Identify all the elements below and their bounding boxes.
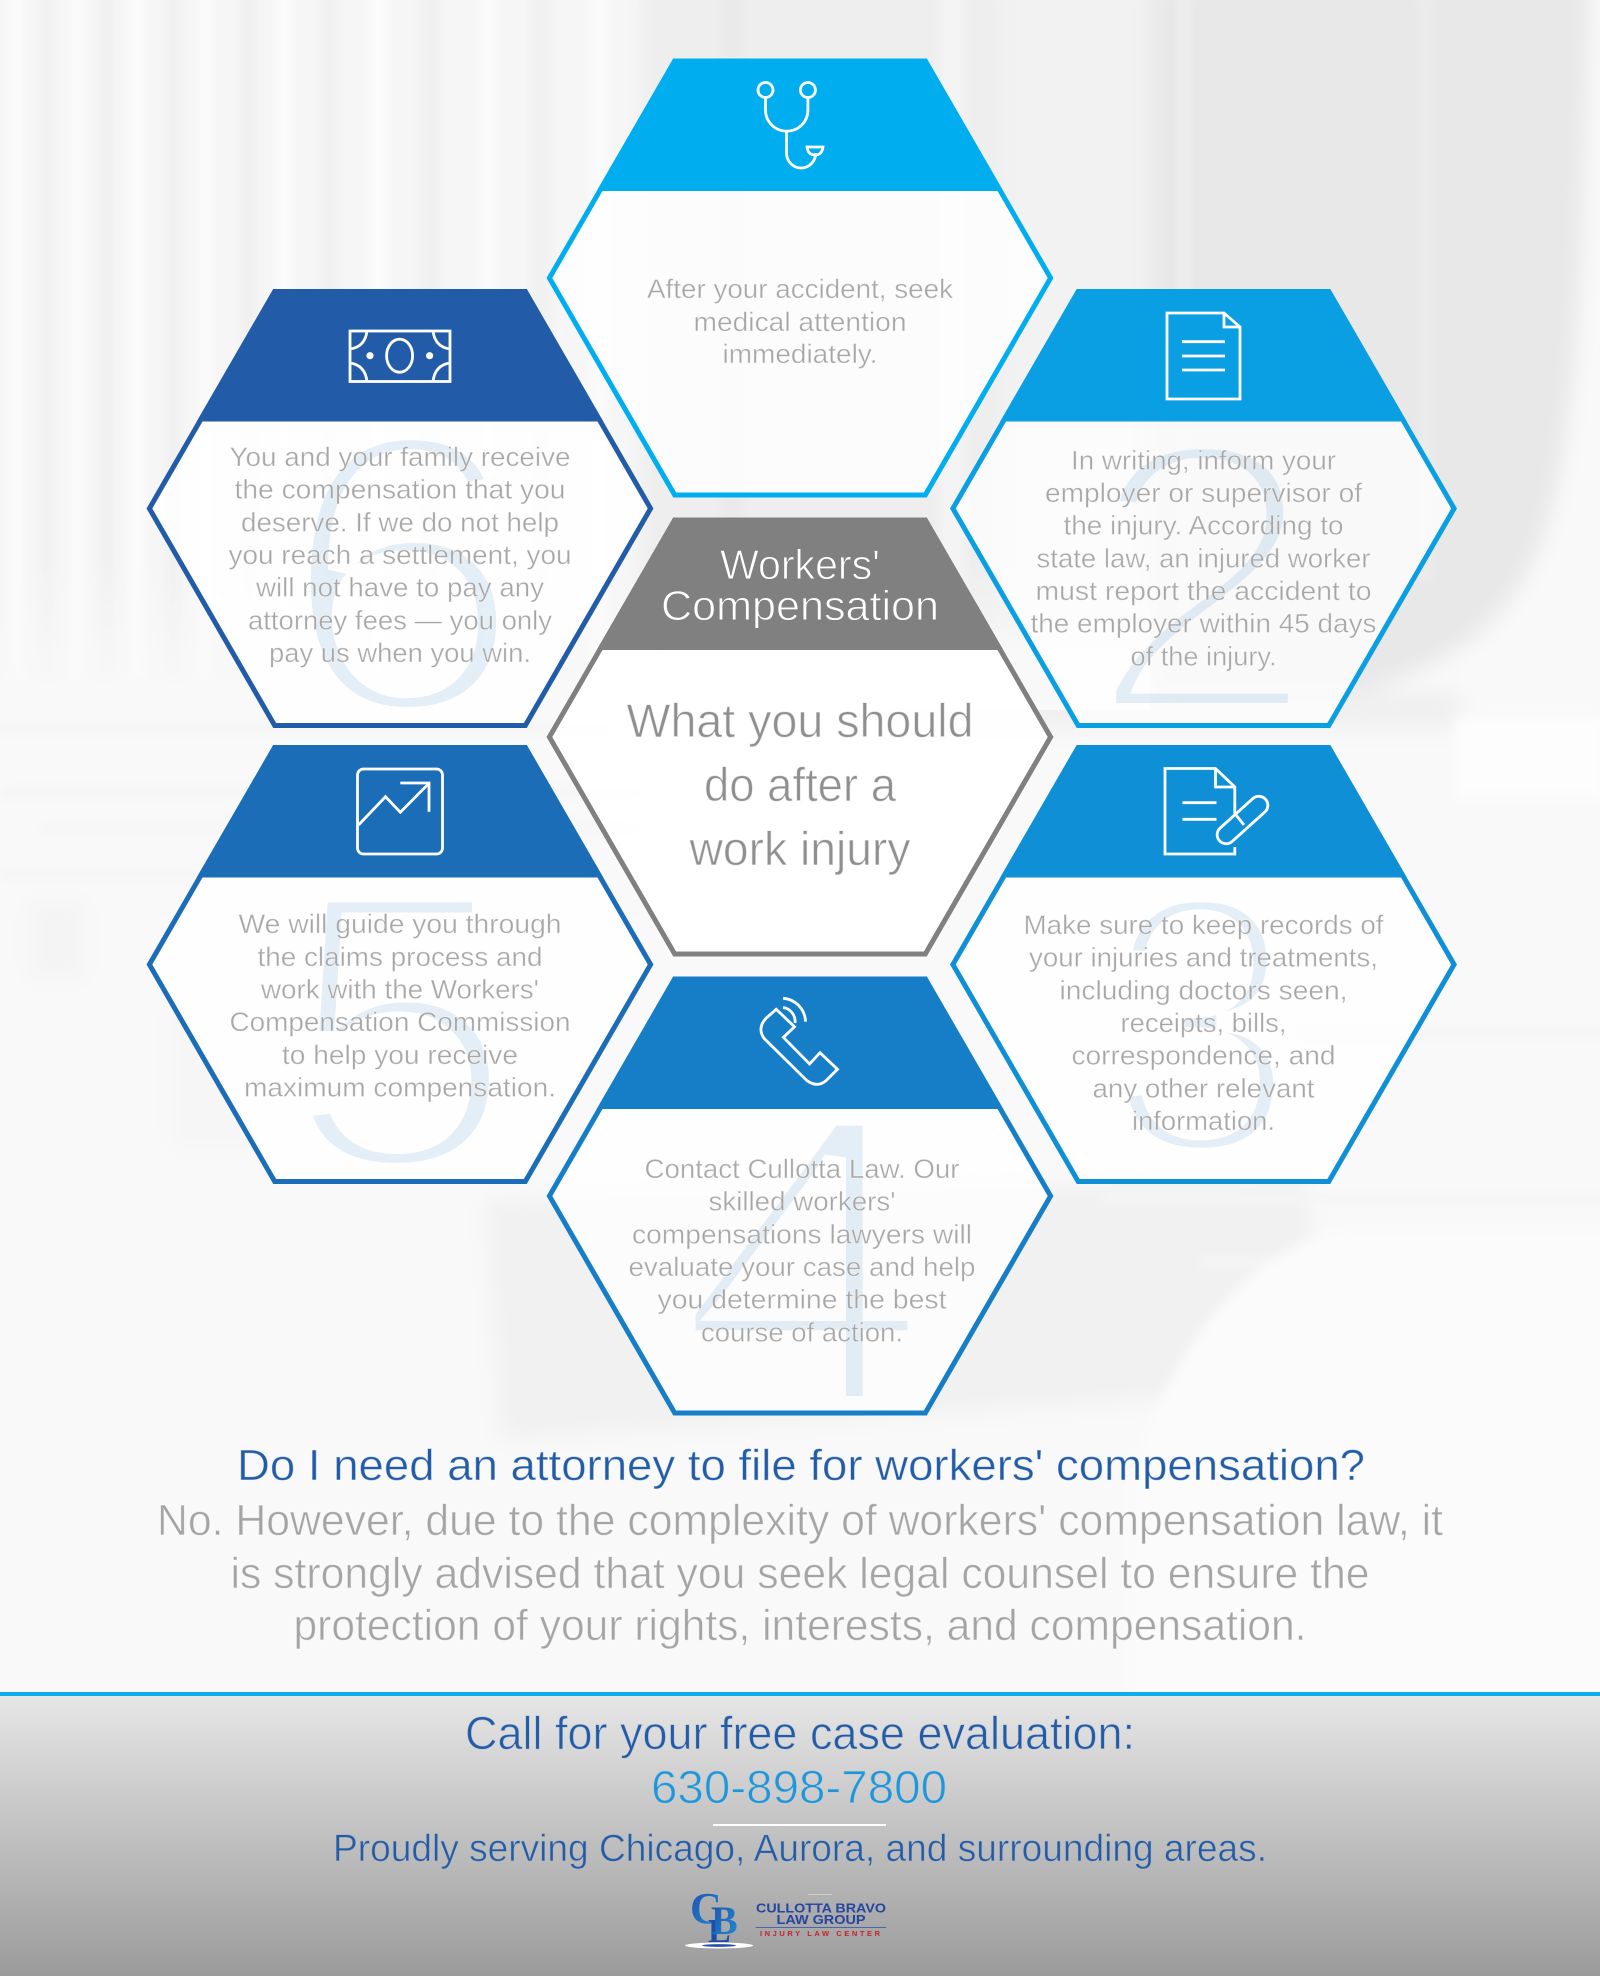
divider (713, 1824, 886, 1826)
text: step 6: you reach a settlement, you (228, 540, 572, 570)
call to action: Call for your free case evaluation: (465, 1707, 1135, 1759)
text: step 5: to help you receive (282, 1040, 518, 1070)
text: step 6 (228, 442, 572, 668)
answer paragraph (157, 1496, 1443, 1650)
logo: Cullotta Bravo Law Group: C (690, 1884, 722, 1933)
text: step 3: information. (1132, 1106, 1275, 1136)
text: step 3: including doctors seen, (1060, 975, 1348, 1005)
service area: Proudly serving Chicago, Aurora, and surrounding areas. (333, 1828, 1267, 1870)
text: step 3: your injuries and treatments, (1029, 943, 1378, 973)
text: step 3: correspondence, and (1072, 1041, 1336, 1071)
text: step 1: immediately. (722, 339, 878, 369)
centre hexagon: title (549, 518, 1051, 954)
text: step 2: must report the accident to (1036, 576, 1372, 606)
heading: Workers' Compensation (661, 541, 939, 629)
ghost numeral 4: 4 (674, 1025, 932, 1496)
ghost numeral 3: 3 (1104, 816, 1298, 1234)
text: step 2: the injury. According to (1064, 511, 1344, 541)
text: step 4: course of action. (701, 1317, 903, 1347)
hexagon 6: receive compensation (146, 289, 654, 728)
answer paragraph: is strongly advised that you seek legal counsel to ensure the (230, 1549, 1370, 1598)
text: step 5 (230, 909, 570, 1102)
text: step 1 (647, 274, 954, 369)
subheading: What you should do after a work injury: What you should (626, 694, 974, 747)
text: step 6: attorney fees — you only (248, 605, 552, 635)
text: step 4 (628, 1154, 976, 1347)
question heading: Do I need an attorney to file for workers' compensation? (237, 1441, 1365, 1490)
text: step 4: Contact Cullotta Law. Our (644, 1154, 960, 1184)
hexagon 2: inform your employer (950, 289, 1457, 728)
subheading: What you should do after a work injury (626, 694, 974, 875)
text: step 4: skilled workers' (708, 1187, 896, 1217)
text: step 4: you determine the best (658, 1285, 947, 1315)
text: step 3: Make sure to keep records of (1024, 910, 1384, 940)
logo: Cullotta Bravo Law Group (685, 1884, 886, 1950)
logo: Cullotta Bravo Law Group: B (711, 1898, 738, 1943)
text: step 2: state law, an injured worker (1036, 543, 1371, 573)
ghost numeral 2: 2 (1084, 359, 1320, 797)
text: step 6: will not have to pay any (255, 573, 545, 603)
logo: Cullotta Bravo Law Group: INJURY LAW CENTER (760, 1929, 881, 1938)
text: step 6: the compensation that you (234, 475, 566, 505)
text: step 4: evaluate your case and help (628, 1252, 976, 1282)
footer band (0, 1692, 1600, 1976)
text: step 5: work with the Workers' (260, 974, 539, 1004)
text: step 2: In writing, inform your (1071, 445, 1336, 475)
answer paragraph: No. However, due to the complexity of workers' compensation law, it (157, 1496, 1443, 1545)
text: step 1: After your accident, seek (647, 274, 954, 304)
ghost numeral 5: 5 (283, 806, 517, 1255)
text: step 2 (1030, 445, 1376, 671)
text: step 2: employer or supervisor of (1045, 478, 1363, 508)
text: step 5: Compensation Commission (230, 1007, 570, 1037)
text: step 5: We will guide you through (238, 909, 562, 939)
hexagon 5: guide through claims (146, 745, 654, 1184)
hexagon 3: keep records (953, 745, 1454, 1234)
icon: stethoscope (758, 82, 823, 168)
icon: rising chart (358, 769, 442, 854)
answer paragraph: protection of your rights, interests, and compensation. (294, 1601, 1306, 1650)
text: step 3 (1024, 910, 1384, 1136)
text: step 4: compensations lawyers will (632, 1219, 972, 1249)
ghost numeral 6: 6 (277, 346, 527, 799)
text: step 6: You and your family receive (230, 442, 570, 472)
hexagon 1: seek medical attention (549, 58, 1051, 495)
hexagon 4: contact Cullotta Law (546, 976, 1054, 1416)
text: step 2: the employer within 45 days (1030, 609, 1376, 639)
text: step 6: deserve. If we do not help (241, 507, 559, 537)
icon: document (1167, 313, 1240, 399)
icon: document with pen (1165, 768, 1272, 854)
text: step 1: medical attention (694, 307, 906, 337)
text: step 3: receipts, bills, (1120, 1008, 1286, 1038)
text: step 5: the claims process and (258, 942, 542, 972)
heading: Workers' Compensation: Workers' (720, 541, 880, 588)
logo: Cullotta Bravo Law Group: LAW GROUP (776, 1913, 866, 1927)
logo: Cullotta Bravo Law Group: L (708, 1913, 731, 1950)
phone number: 630-898-7800 (651, 1761, 947, 1813)
logo: Cullotta Bravo Law Group: CULLOTTA BRAVO (756, 1902, 886, 1916)
text: step 3: any other relevant (1092, 1073, 1315, 1103)
subheading: What you should do after a work injury: work injury (689, 822, 911, 875)
icon: telephone (761, 998, 838, 1084)
heading: Workers' Compensation: Compensation (661, 582, 939, 629)
subheading: What you should do after a work injury: do after a (704, 758, 897, 811)
text: step 2: of the injury. (1130, 641, 1276, 671)
text: step 5: maximum compensation. (244, 1072, 556, 1102)
icon: banknote (350, 331, 450, 382)
text: step 6: pay us when you win. (269, 638, 531, 668)
